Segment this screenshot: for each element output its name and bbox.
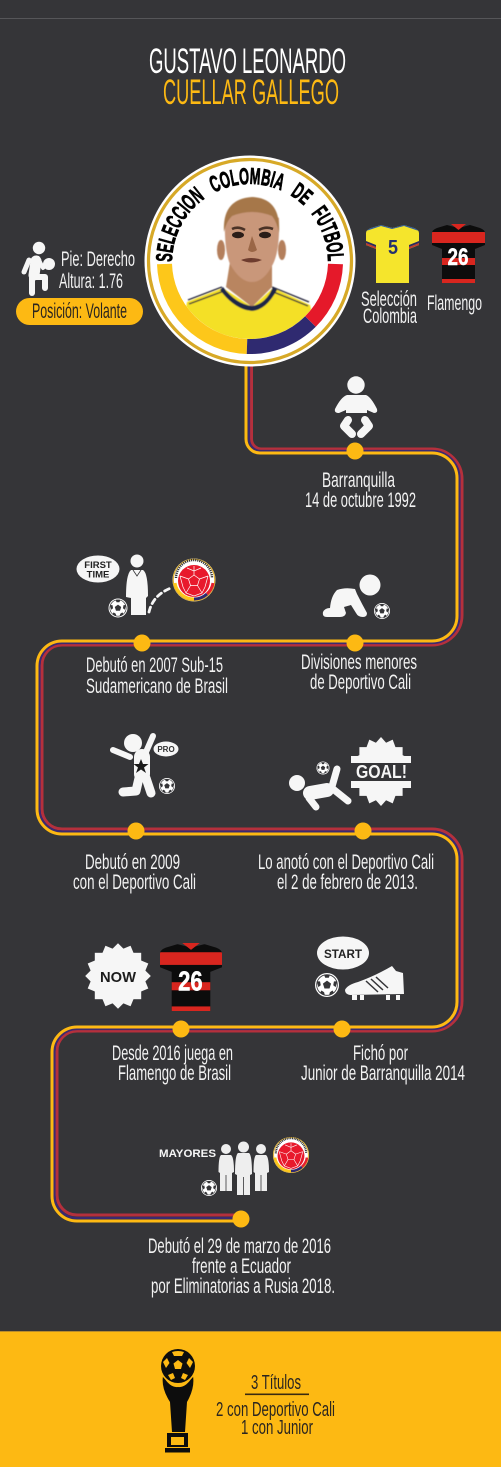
titles text bbox=[216, 1371, 335, 1439]
text: Flamengo since 2016 bbox=[112, 1041, 233, 1085]
icon: now burst: NOW bbox=[100, 969, 137, 986]
icon: pro player celebrating: PRO bbox=[157, 745, 175, 754]
facial features bbox=[232, 228, 273, 262]
titles text: 3 Títulos bbox=[251, 1371, 301, 1394]
icon: Flamengo jersey bbox=[432, 224, 485, 283]
text: senior debut: frente a Ecuador bbox=[192, 1254, 291, 1278]
text: professional debut bbox=[73, 850, 196, 894]
speech bubble bbox=[76, 556, 120, 582]
player badge bbox=[144, 156, 356, 366]
text: senior debut bbox=[148, 1234, 335, 1298]
text: senior debut: por Eliminatorias a Rusia 2018. bbox=[151, 1274, 335, 1298]
text: birthplace bbox=[305, 468, 416, 512]
overhead kick figure bbox=[289, 762, 348, 807]
titles text: 1 con Junior bbox=[241, 1416, 313, 1439]
title: CUELLAR GALLEGO bbox=[163, 73, 339, 112]
boot bbox=[345, 966, 404, 1000]
icon: baby bbox=[335, 376, 377, 434]
text: senior debut: Debutó el 29 de marzo de 2016 bbox=[148, 1234, 331, 1258]
icon: Flamengo jersey large: 26 bbox=[178, 965, 203, 996]
text: Flamengo since 2016: Flamengo de Brasil bbox=[118, 1061, 231, 1085]
title bbox=[149, 42, 346, 112]
panel: titles footer bbox=[0, 1331, 501, 1467]
player photo bbox=[186, 196, 312, 339]
timeline path bbox=[37, 366, 462, 1221]
goal burst: GOAL! bbox=[356, 762, 407, 782]
icon: Colombia jersey: 5 bbox=[388, 237, 398, 259]
text: Flamengo since 2016: Desde 2016 juega en bbox=[112, 1041, 233, 1065]
text: youth divisions bbox=[301, 650, 417, 694]
foot and height text: Pie: Derecho bbox=[61, 247, 135, 271]
text: Sub-15 debut: Sudamericano de Brasil bbox=[86, 674, 228, 698]
icon: player kicking ball bbox=[24, 242, 55, 293]
position pill bbox=[16, 298, 143, 325]
icon: Flamengo jersey large bbox=[160, 943, 222, 1011]
text: professional debut: Debutó en 2009 bbox=[85, 850, 180, 874]
foot and height text: Altura: 1.76 bbox=[59, 269, 123, 293]
jersey labels: Colombia bbox=[363, 304, 417, 328]
icon: now burst bbox=[85, 943, 151, 1009]
foot and height text bbox=[59, 247, 135, 293]
timeline dots bbox=[128, 442, 372, 1228]
icon: overhead kick and goal burst bbox=[289, 737, 416, 807]
icon: senior team bbox=[159, 1137, 309, 1196]
icon: first time debut bbox=[76, 554, 216, 618]
jersey labels bbox=[361, 287, 482, 328]
text: Junior signing: Fichó por bbox=[353, 1041, 408, 1065]
badge curved text: SELECCION COLOMBIA DE FUTBOL bbox=[156, 168, 344, 262]
icon: pro player celebrating bbox=[113, 734, 178, 794]
titles text: 2 con Deportivo Cali bbox=[216, 1398, 335, 1421]
jersey labels: Selección bbox=[361, 287, 417, 311]
text: Sub-15 debut: Debutó en 2007 Sub-15 bbox=[86, 653, 223, 677]
text: youth divisions: Divisiones menores bbox=[301, 650, 417, 674]
icon: start, ball and boot: START bbox=[324, 947, 363, 961]
standing figure bbox=[126, 554, 148, 615]
speech bubble: TIME bbox=[87, 570, 109, 580]
icon: senior team: MAYORES bbox=[159, 1148, 216, 1160]
three figures bbox=[218, 1142, 269, 1195]
icon: crawling child with ball bbox=[323, 574, 390, 619]
icon: Colombia jersey bbox=[366, 224, 419, 283]
icon: trophy bbox=[161, 1349, 195, 1452]
position pill: Posición: Volante bbox=[32, 300, 127, 323]
text: Sub-15 debut bbox=[86, 653, 228, 698]
text: goal with Deportivo Cali: el 2 de febrero de 2013. bbox=[277, 870, 418, 894]
speech bubble: FIRST bbox=[84, 560, 112, 571]
text: birthplace: Barranquilla bbox=[322, 468, 395, 492]
text: Junior signing bbox=[301, 1041, 465, 1085]
text: professional debut: con el Deportivo Cali bbox=[73, 870, 196, 894]
icon: start, ball and boot bbox=[315, 936, 404, 1000]
badge tricolor band bbox=[164, 264, 336, 347]
text: youth divisions: de Deportivo Cali bbox=[310, 670, 411, 694]
icon: Flamengo jersey: 26 bbox=[448, 244, 468, 271]
text: goal with Deportivo Cali bbox=[258, 850, 434, 894]
text: birthplace: 14 de octubre 1992 bbox=[305, 488, 416, 512]
